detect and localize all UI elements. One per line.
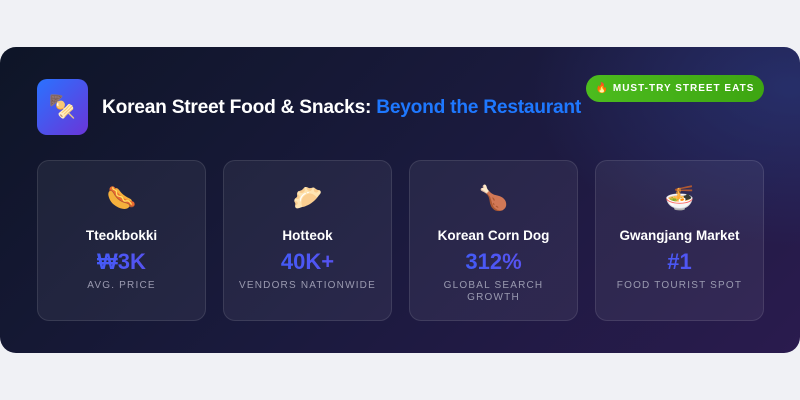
panel: Gwangjang Market: 🍜 [665,185,694,212]
panel: Tteokbokki: Tteokbokki [86,228,157,243]
panel: Gwangjang Market: Gwangjang Market [619,228,740,243]
panel: Gwangjang Market [595,160,764,321]
icon: skewer logo: 🍢 [49,94,76,119]
panel: Korean Corn Dog: 312% [465,249,522,274]
panel: Korean Corn Dog: 🍗 [479,185,508,212]
panel: Hotteok: 🥟 [293,185,322,212]
panel: Tteokbokki: AVG. PRICE [87,280,156,291]
panel: Hotteok: VENDORS NATIONWIDE [239,280,376,291]
panel: Tteokbokki: ₩3K [97,249,146,274]
title: Korean Street Food & Snacks: Beyond the Restaurant [102,97,581,118]
panel: Korean Corn Dog [409,160,578,321]
panel: Tteokbokki [37,160,206,321]
panel: Hotteok [223,160,392,321]
panel: Gwangjang Market: FOOD TOURIST SPOT [617,280,742,291]
panel: Hotteok: 40K+ [281,249,334,274]
icon: skewer logo [37,79,88,135]
panel: Gwangjang Market: #1 [667,249,692,274]
panel: Korean Corn Dog: GLOBAL SEARCH GROWTH [444,280,543,303]
panel: main card [0,47,800,353]
panel: Hotteok: Hotteok [282,228,333,243]
badge: must-try: 🔥 MUST-TRY STREET EATS [596,83,754,94]
badge: must-try [586,75,764,102]
panel: Korean Corn Dog: Korean Corn Dog [438,228,549,243]
panel: Tteokbokki: 🌭 [107,185,136,212]
